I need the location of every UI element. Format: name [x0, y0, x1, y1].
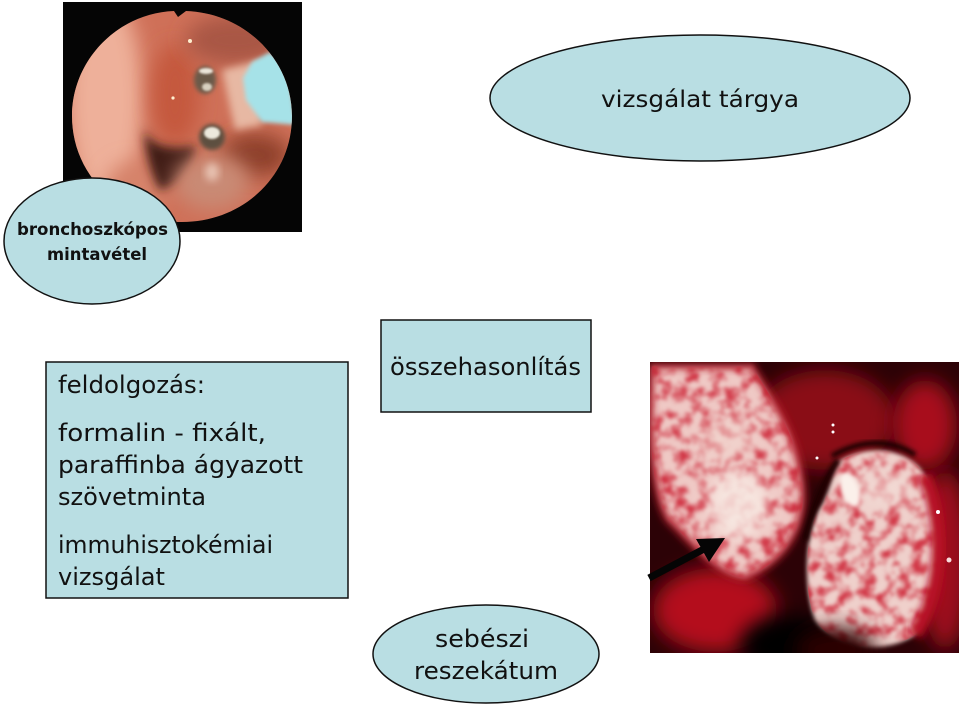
photo: bronchoscopic view — [63, 0, 302, 232]
label: sebészi reszekátum: reszekátum — [414, 657, 558, 685]
panel text: vizsgálat — [58, 563, 165, 591]
label: vizsgálat tárgya: vizsgálat tárgya — [601, 87, 799, 113]
ellipse: bronchoszkópos mintavétel — [4, 178, 180, 304]
panel text: paraffinba ágyazott — [58, 451, 303, 479]
label: bronchoszkópos mintavétel: bronchoszkópos — [17, 220, 168, 240]
left tissue mass — [650, 366, 803, 578]
panel text: formalin - fixált, — [58, 419, 266, 447]
label: bronchoszkópos mintavétel: mintavétel — [47, 245, 147, 265]
ellipse: sebészi reszekátum — [373, 605, 599, 703]
panel text: feldolgozás: — [58, 371, 205, 399]
right tissue mass — [807, 451, 939, 647]
ellipse: vizsgálat tárgya — [490, 35, 910, 161]
panel text: szövetminta — [58, 483, 206, 511]
label: összehasonlítás: összehasonlítás — [390, 353, 581, 381]
panel: feldolgozás — [46, 362, 348, 598]
box: összehasonlítás — [381, 320, 591, 412]
panel text: immuhisztokémiai — [58, 531, 273, 559]
arrow: pointing to tumour — [649, 538, 725, 578]
photo: surgical resection specimen — [650, 362, 960, 675]
label: sebészi reszekátum: sebészi — [435, 625, 529, 653]
